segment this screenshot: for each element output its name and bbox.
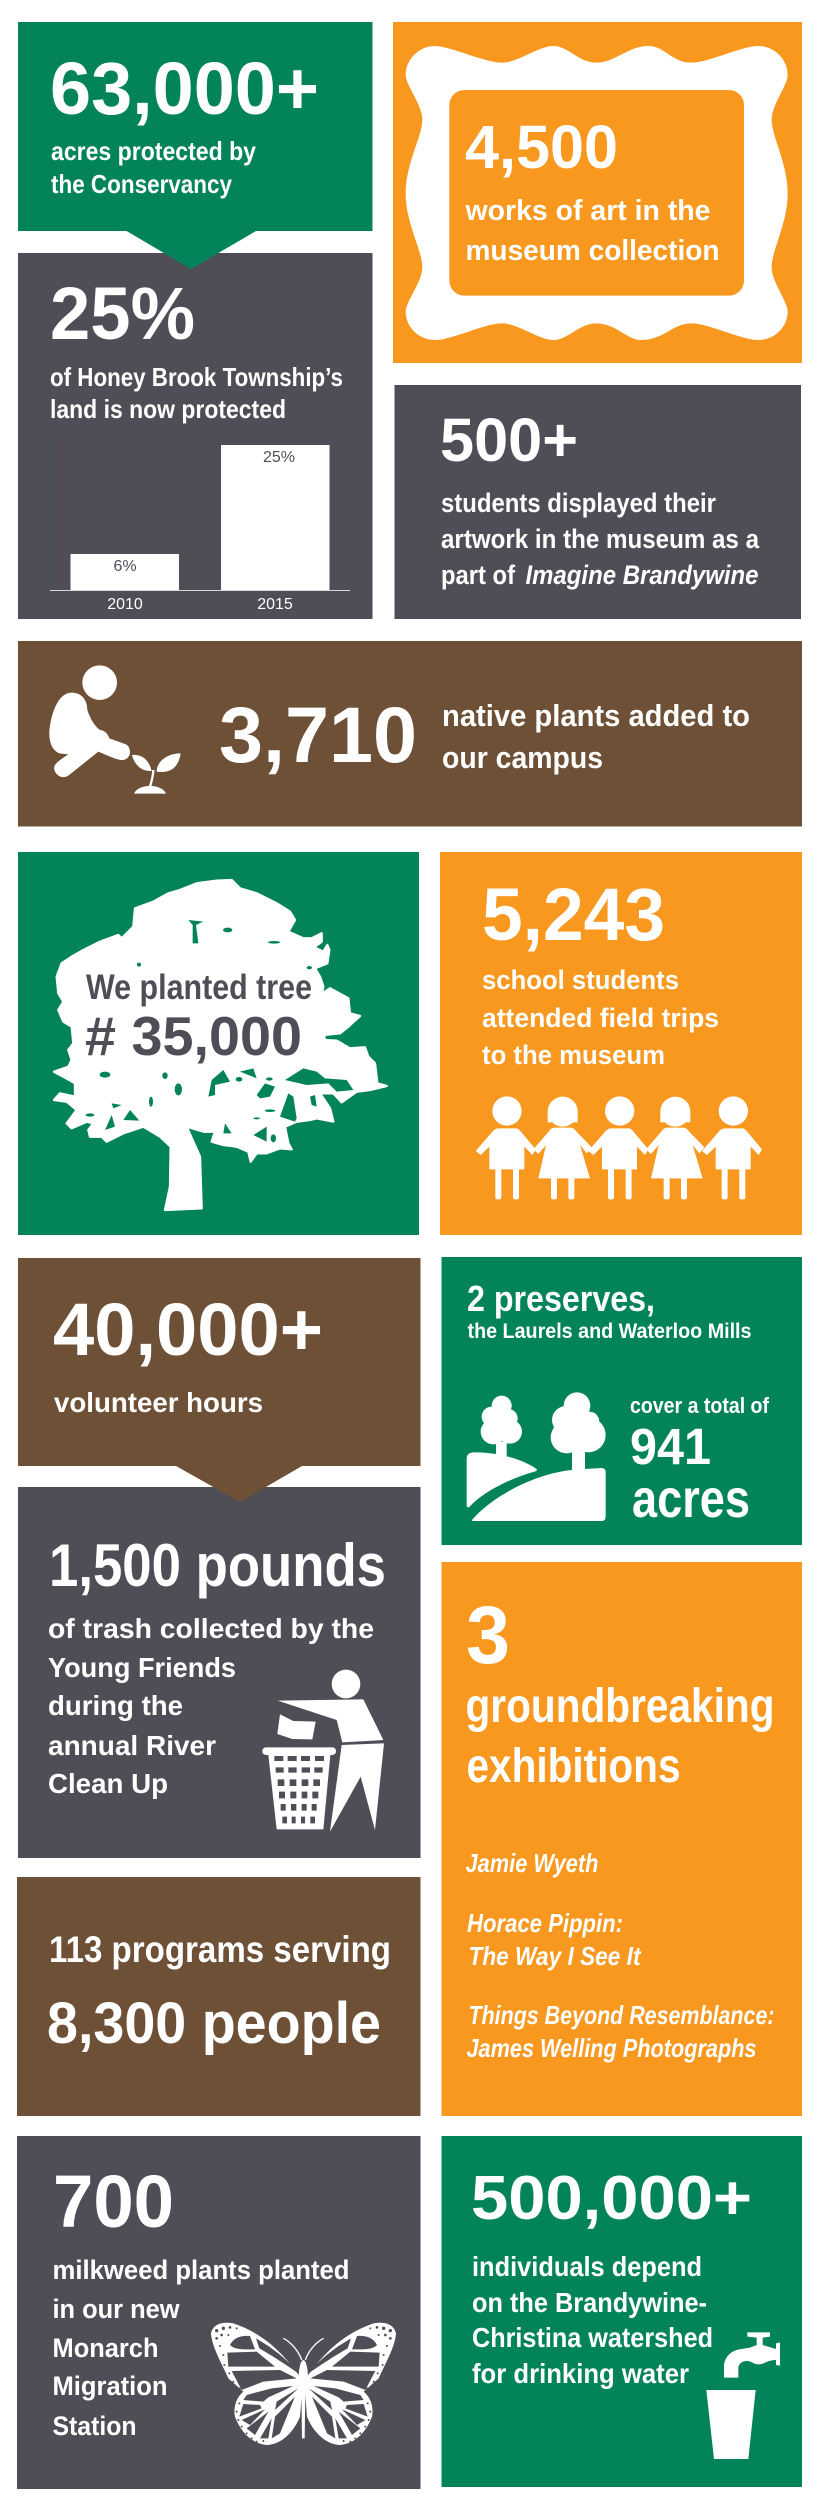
stat: 25%: 25%	[50, 272, 195, 355]
text: works of art: works of art in the	[465, 195, 710, 227]
stat: 63,000+: 63,000+	[50, 47, 319, 130]
panel: 3,710 native plants	[18, 641, 802, 826]
text: milkweed description: Monarch	[52, 2333, 158, 2363]
stat: 941 acres	[630, 1418, 750, 1529]
text: milkweed description: milkweed plants planted	[52, 2255, 350, 2285]
text: students description	[441, 488, 760, 590]
stat: 700: 700	[53, 2160, 174, 2243]
stat: 3: 3	[466, 1590, 510, 1681]
text: exhibition titles: The Way I See It	[468, 1941, 642, 1971]
icon: faucet and cup	[706, 2332, 780, 2459]
text: acres protected	[51, 136, 256, 199]
bar chart: protected land 2010 vs 2015: 2015	[257, 596, 293, 613]
icon: trees on hills	[467, 1392, 606, 1521]
text: trash description: annual River	[48, 1730, 216, 1761]
stat: 4,500: 4,500	[465, 113, 618, 181]
text: native plants description	[442, 698, 750, 775]
text: students description: part of	[441, 560, 516, 590]
text: exhibition titles: Horace Pippin:	[467, 1908, 623, 1938]
panel: 25% of Honey Brook Township protected	[18, 253, 372, 619]
heading: 2 preserves: 2 preserves,	[467, 1278, 655, 1319]
panel: 1,500 pounds of trash	[18, 1487, 420, 1858]
bar chart: protected land 2010 vs 2015: 6%	[113, 558, 137, 575]
icon: tree silhouette	[54, 880, 387, 1210]
panel: 40,000+ volunteer hours	[18, 1258, 420, 1502]
stat: # 35,000: # 35,000	[85, 1005, 302, 1067]
text: trash description: Clean Up	[48, 1768, 168, 1799]
text: school students description: attended field trips	[482, 1003, 719, 1033]
text: native plants description: our campus	[442, 740, 603, 775]
text: milkweed description: Migration	[52, 2371, 168, 2401]
stat: 941 acres: acres	[632, 1469, 750, 1529]
icon: person planting seedling	[49, 665, 181, 794]
text: exhibition titles: Jamie Wyeth	[466, 1848, 598, 1878]
text: works of art: museum collection	[466, 235, 720, 267]
text: preserve names: the Laurels and Waterloo Mills	[468, 1320, 752, 1343]
stat: 5,243: 5,243	[482, 873, 665, 956]
stat: 941 acres: 941	[630, 1418, 711, 1475]
text: 113 programs serving: 113 programs serving	[49, 1929, 391, 1970]
text: native plants description: native plants added to	[442, 698, 750, 733]
panel: 63,000+ acres	[18, 22, 372, 269]
panel: 500+ students	[394, 385, 801, 619]
heading: groundbreaking exhibitions	[466, 1680, 774, 1793]
icon: children holding hands	[476, 1096, 762, 1199]
text: trash description	[48, 1613, 374, 1799]
text: school students description: to the museum	[482, 1040, 665, 1070]
panel: 500,000+ individuals	[442, 2136, 802, 2487]
bar chart: protected land 2010 vs 2015	[50, 439, 350, 613]
stat: 40,000+: 40,000+	[53, 1288, 323, 1371]
text: watershed description: on the Brandywine-	[472, 2287, 707, 2318]
text: students description: Imagine Brandywine	[526, 560, 758, 590]
text: trash description: during the	[48, 1690, 183, 1721]
stat: 3,710: 3,710	[219, 690, 417, 779]
text: Honey Brook description: of Honey Brook Township’s	[50, 362, 343, 392]
text: cover a total of: cover a total of	[630, 1393, 770, 1418]
text: students description: students displayed their	[441, 488, 716, 518]
text: exhibition titles: James Welling Photographs	[466, 2033, 756, 2063]
text: exhibition titles	[466, 1848, 774, 2063]
text: Honey Brook description	[50, 362, 343, 424]
panel: 2 preserves, 941 acres	[442, 1257, 802, 1545]
panel: 700 milkweed plants	[17, 2136, 420, 2489]
stat: 500,000+: 500,000+	[471, 2164, 752, 2233]
text: watershed description: for drinking water	[472, 2358, 689, 2389]
icon: person dropping trash in basket	[262, 1670, 384, 1832]
text: students description: artwork in the museum as a	[441, 524, 760, 554]
bar chart: protected land 2010 vs 2015: 2010	[107, 596, 143, 613]
heading: groundbreaking exhibitions: exhibitions	[466, 1740, 680, 1793]
panel: 5,243 school students	[440, 852, 802, 1235]
text: watershed description: individuals depend	[472, 2251, 702, 2282]
text: watershed description	[472, 2251, 713, 2389]
text: we planted tree: We planted tree	[86, 968, 312, 1007]
text: acres protected: the Conservancy	[51, 169, 232, 199]
heading: groundbreaking exhibitions: groundbreaking	[466, 1680, 774, 1733]
panel: 4,500 works of art	[393, 22, 802, 363]
icon: monarch butterfly	[211, 2323, 396, 2445]
stat: 8,300 people: 8,300 people	[47, 1991, 381, 2056]
text: watershed description: Christina watershed	[472, 2322, 713, 2353]
panel: 113 programs, 8,300 people	[17, 1877, 420, 2116]
stat: 500+: 500+	[440, 406, 578, 474]
text: milkweed description	[52, 2255, 350, 2441]
panel: 3 groundbreaking exhibitions	[442, 1562, 802, 2116]
text: milkweed description: Station	[52, 2411, 136, 2441]
text: trash description: of trash collected by the	[48, 1613, 374, 1644]
text: milkweed description: in our new	[52, 2294, 180, 2324]
panel: tree number 35,000	[18, 852, 419, 1235]
text: school students description: school students	[482, 965, 679, 995]
text: Honey Brook description: land is now protected	[50, 394, 286, 424]
bar chart: protected land 2010 vs 2015: 25%	[263, 449, 295, 466]
text: school students description	[482, 965, 719, 1070]
text: acres protected: acres protected by	[51, 136, 256, 166]
icon: ornate picture frame	[406, 46, 788, 340]
text: works of art	[465, 195, 720, 267]
text: trash description: Young Friends	[48, 1652, 236, 1683]
stat: 1,500 pounds: 1,500 pounds	[49, 1532, 386, 1599]
text: volunteer hours: volunteer hours	[54, 1387, 263, 1418]
